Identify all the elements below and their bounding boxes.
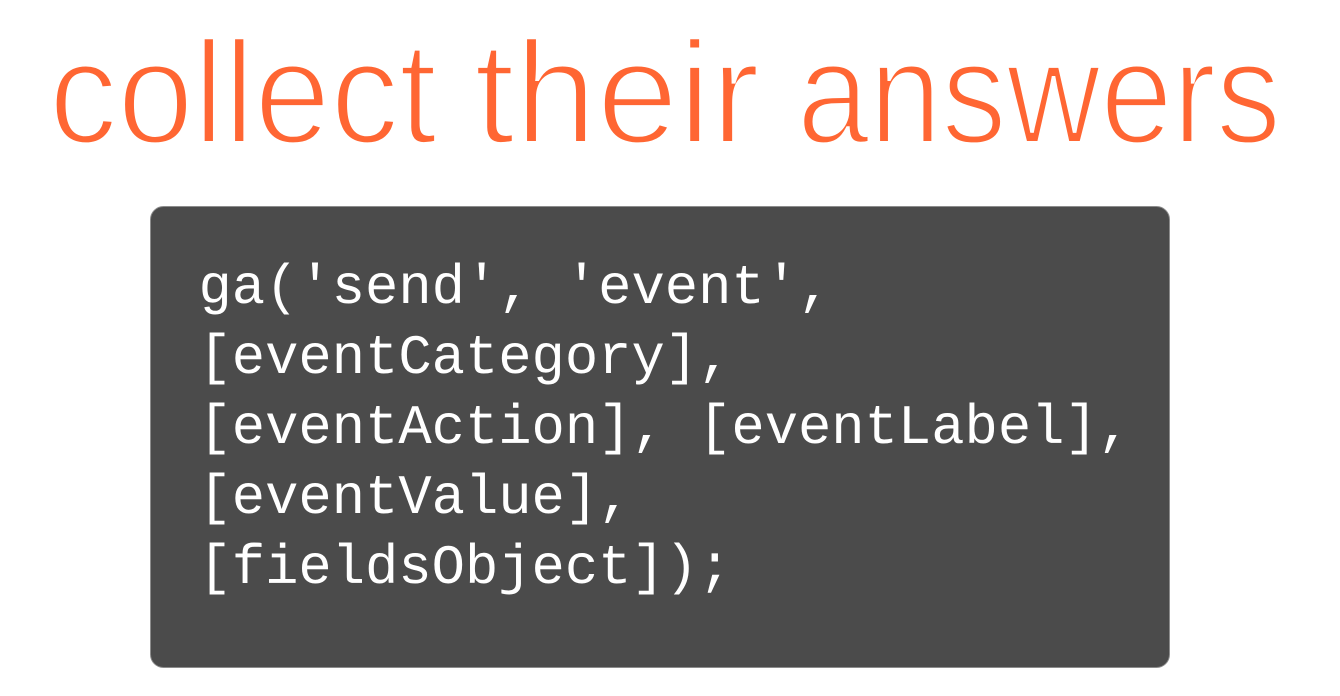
code text: ga('send', 'event', <box>198 257 831 320</box>
code text: [eventAction], [eventLabel], <box>198 397 1131 460</box>
title <box>49 11 1281 174</box>
title: answers <box>797 11 1281 174</box>
code text <box>198 257 1131 600</box>
panel: code block <box>150 206 1170 668</box>
code text: [fieldsObject]); <box>198 537 731 600</box>
title: their <box>474 11 760 174</box>
code panel background <box>150 206 1170 668</box>
code text: [eventValue], <box>198 467 631 530</box>
code text: [eventCategory], <box>198 327 731 390</box>
title: collect <box>49 11 437 174</box>
